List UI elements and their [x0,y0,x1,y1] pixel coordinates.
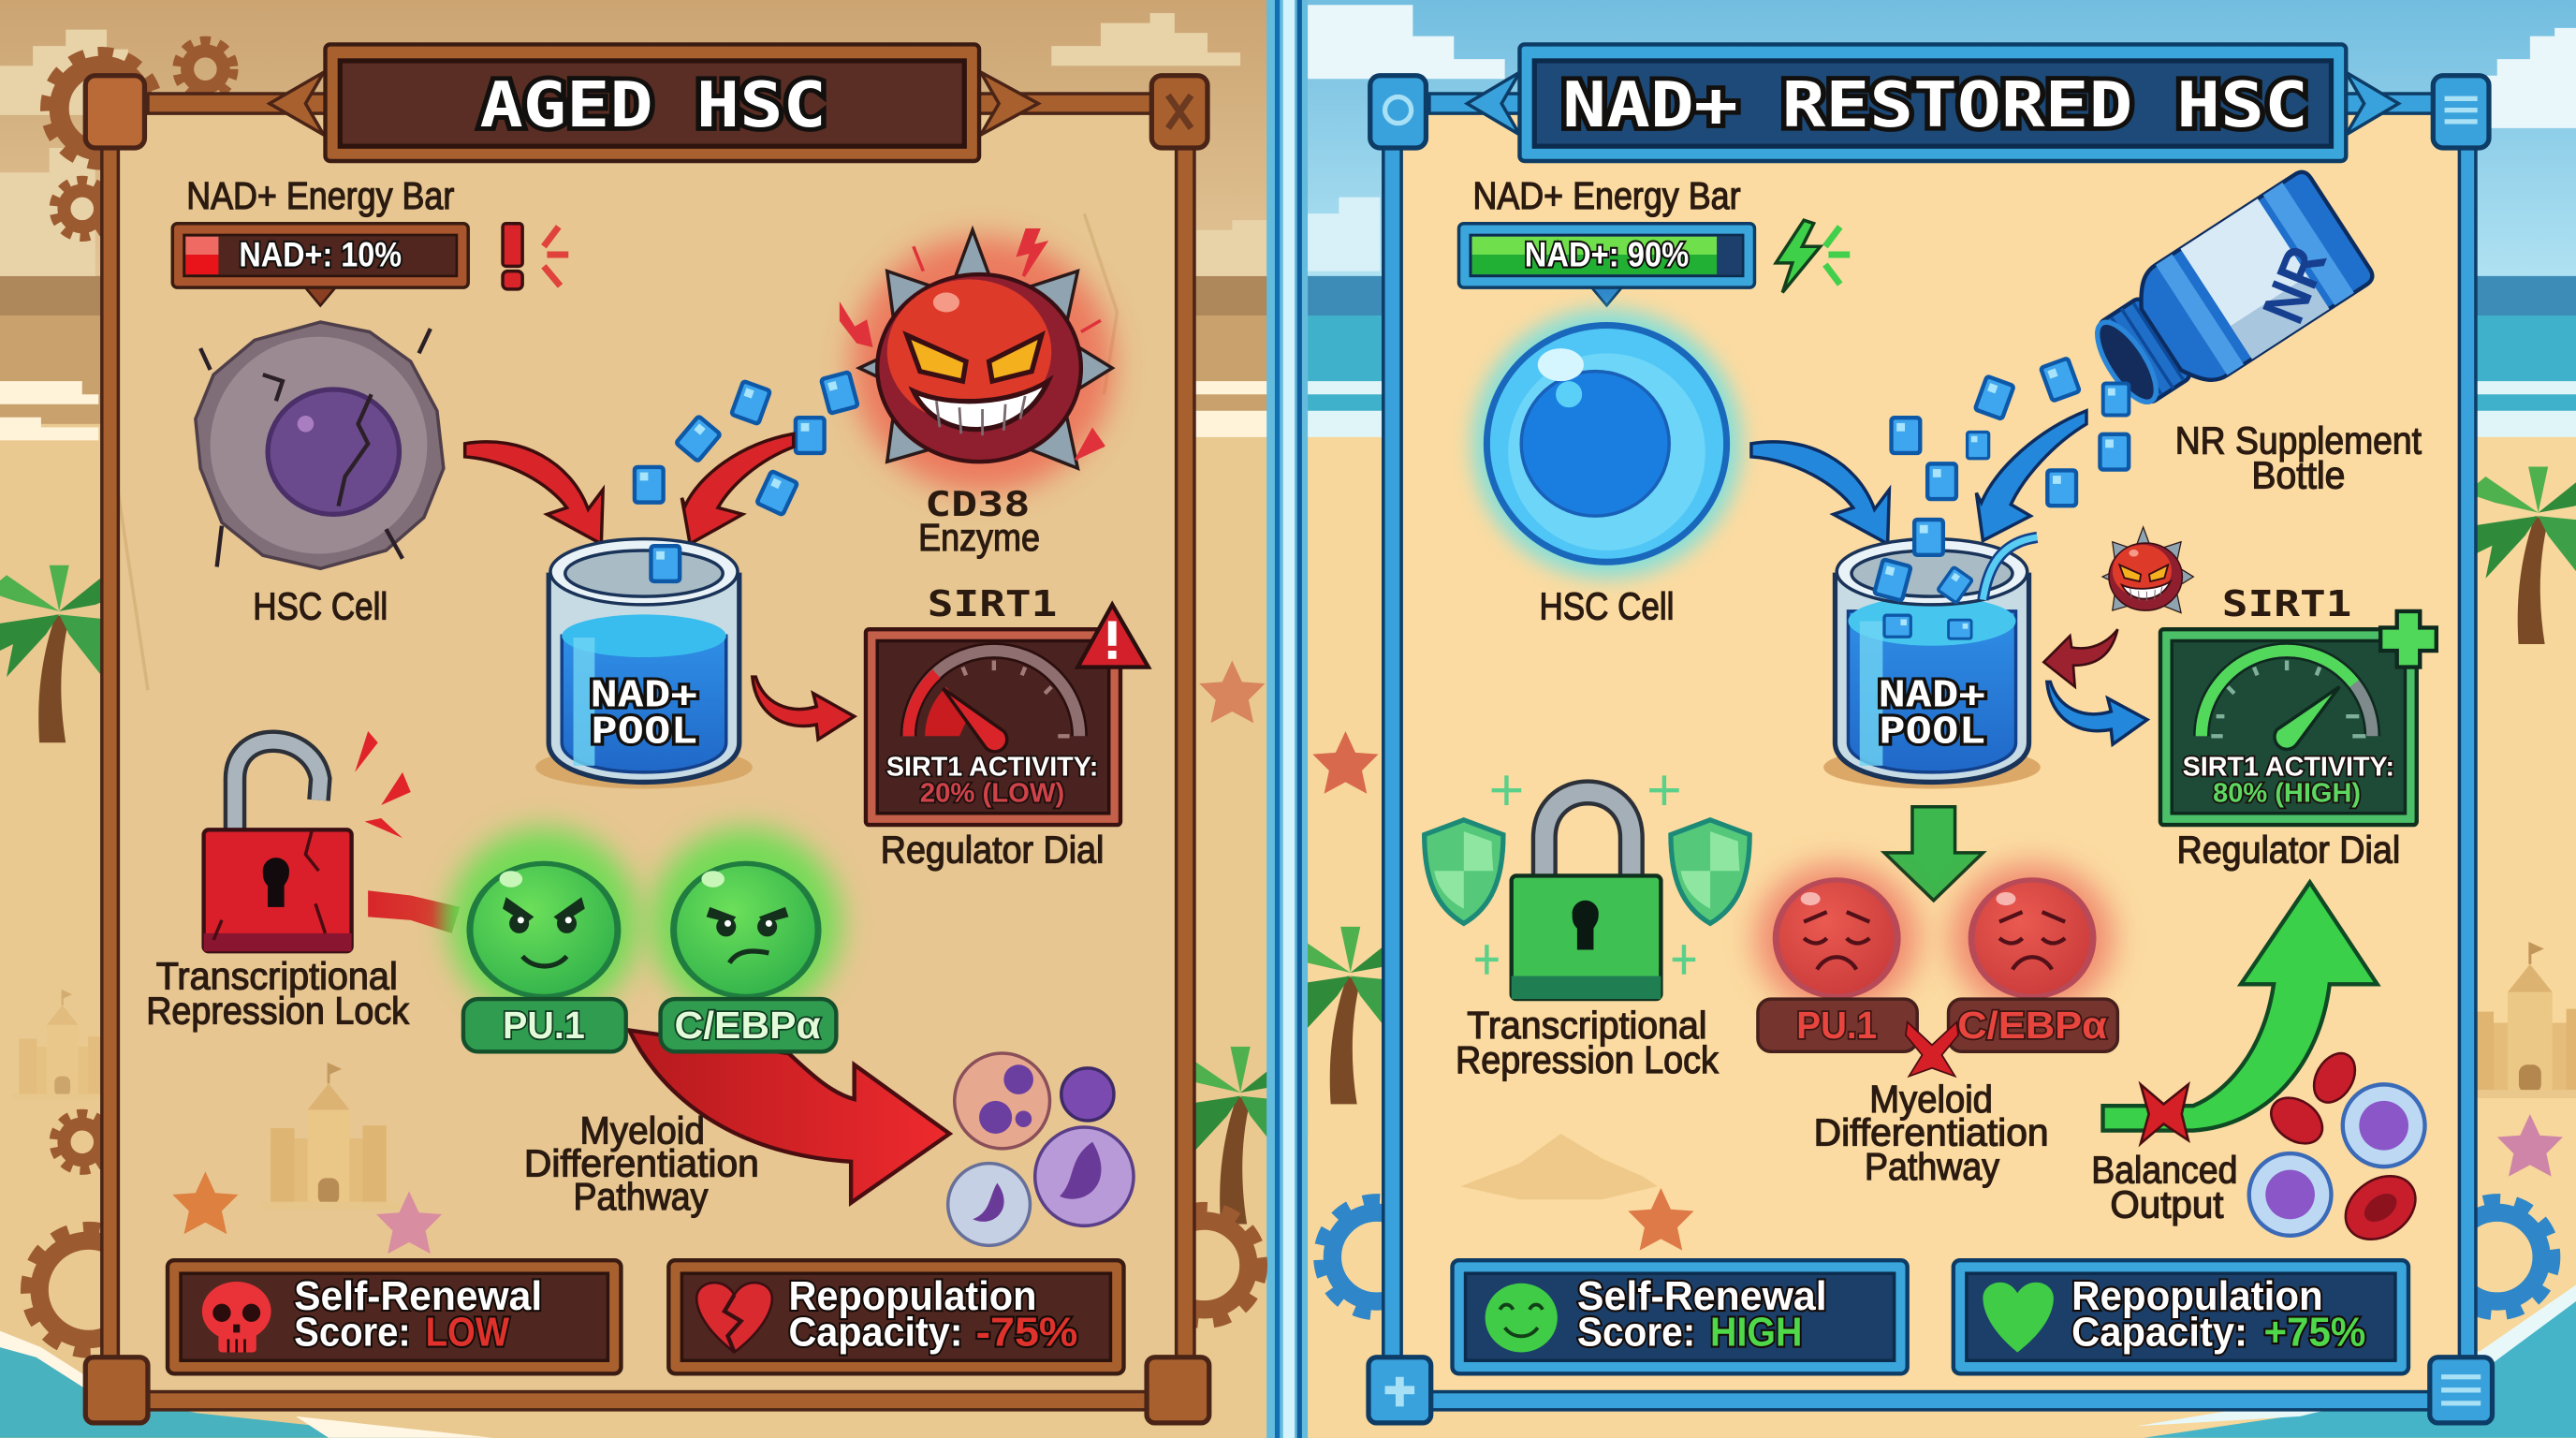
NR supplement bottle: Bottle [2251,453,2345,496]
mini CD38 enzyme [2102,527,2193,613]
icon: blocked X [1906,1022,1958,1077]
SIRT1 dial: restored: SIRT1 [2222,583,2351,625]
SIRT1 dial: restored: Regulator Dial [2177,828,2400,871]
score box: self-renewal low: Self-Renewal [294,1273,542,1319]
panel: NAD+ restored HSC [1321,44,2553,1423]
SIRT1 dial: aged: SIRT1 [928,583,1057,625]
transcriptional repression lock: closed [1425,775,1749,1081]
C/EBPα ball: repressed [1949,862,2117,1051]
SIRT1 dial: aged: SIRT1 ACTIVITY: [886,752,1098,782]
score box: self-renewal high: HIGH [1710,1309,1802,1355]
label: balanced output [2091,1149,2237,1226]
SIRT1 dial: aged [866,583,1149,871]
score box: repopulation +75%: Repopulation [2071,1273,2323,1319]
SIRT1 dial: aged: 20% (LOW) [920,778,1064,808]
NAD+ cubes: supplied [1889,356,2130,507]
arrow: balanced output up [2103,882,2378,1144]
balanced blood cells [2249,1046,2427,1253]
title banner: restored: NAD+ RESTORED HSC [1562,68,2308,141]
arrow: cell to pool [465,442,603,544]
HSC cell: restored [1472,309,1741,628]
transcriptional repression lock: closed: Transcriptional [1467,1004,1707,1047]
C/EBPα ball: repressed: C/EBPα [1957,1004,2107,1047]
NAD+ pool: aged: POOL [591,710,697,752]
PU.1 ball: overactive [448,829,639,1051]
NAD+ energy bar: restored: NAD+: 90% [1525,235,1689,273]
background: aged beach [0,0,1319,1438]
label: balanced output: Output [2110,1183,2224,1226]
arrow: enzyme to pool [681,433,794,544]
NR supplement bottle: NR Supplement [2175,418,2422,462]
icon: exclamation alert [503,224,568,289]
HSC cell: aged [196,322,444,628]
myeloid cells output [948,1053,1134,1245]
NAD+ pool: restored: POOL [1879,710,1985,752]
icon: smile [1486,1284,1558,1352]
NAD+ pool: aged [535,539,753,788]
score box: repopulation +75% [1954,1260,2408,1373]
NAD+ pool: aged: NAD+ [591,674,697,716]
arrow: cell to pool [1751,442,1889,544]
title banner: restored [1519,44,2346,161]
SIRT1 dial: restored: 80% (HIGH) [2213,778,2361,808]
C/EBPα ball: overactive: C/EBPα [674,1004,821,1047]
label: myeloid pathway: Pathway [574,1175,709,1218]
label: myeloid pathway: Differentiation [524,1142,759,1185]
score box: repopulation -75% [668,1260,1123,1373]
gears: aged [28,41,1260,1351]
score box: repopulation +75%: +75% [2264,1309,2365,1355]
title banner: aged: AGED HSC [479,68,827,141]
decor: sandcastle and starfish [172,1063,442,1254]
icon: warning triangle [1077,605,1149,668]
score box: repopulation -75%: Repopulation [788,1273,1036,1319]
SIRT1 dial: restored: SIRT1 ACTIVITY: [2183,752,2394,782]
icon: shields [1425,820,1749,923]
score box: repopulation +75%: Capacity: [2071,1309,2247,1355]
title banner: aged [326,44,979,161]
transcriptional repression lock: closed: Repression Lock [1456,1038,1720,1081]
HSC cell: restored: HSC Cell [1540,585,1674,628]
SIRT1 dial: restored [2160,583,2437,871]
icon: skull [202,1282,271,1352]
SIRT1 dial: aged: Regulator Dial [881,828,1104,871]
NR supplement bottle [2076,169,2422,496]
score box: self-renewal high: Self-Renewal [1577,1273,1827,1319]
score box: repopulation -75%: -75% [976,1309,1077,1355]
frame: aged [85,72,1209,1423]
decor: sand mound and starfish [1460,1134,1694,1251]
icon: green heart [1983,1283,2054,1352]
transcriptional repression lock: broken [146,731,411,1032]
NAD+ pool: restored [1823,518,2041,788]
label: balanced output: Balanced [2091,1149,2237,1192]
arrow: bottle to pool [1976,411,2086,540]
score box: self-renewal high: Score: [1577,1309,1695,1355]
label: myeloid pathway blocked: Differentiation [1814,1110,2049,1153]
arrow: lock to PU.1 [368,890,460,933]
CD38 enzyme [838,230,1114,559]
arrow: inhibited enzyme [2043,629,2117,687]
HSC cell: aged: HSC Cell [253,585,388,628]
icon: lightning bolt [1776,220,1850,292]
NAD+ energy bar: aged [172,174,468,305]
frame: restored [1368,72,2492,1423]
center divider [1266,0,1308,1438]
NR supplement bottle: NR [2250,238,2339,332]
parchment: restored [1399,105,2465,1397]
C/EBPα ball: overactive [651,829,842,1051]
background: restored beach [1271,0,2576,1438]
score box: self-renewal low: Score: [294,1309,411,1355]
parchment: aged [115,105,1179,1397]
NAD+ pool: restored: NAD+ [1879,674,1985,716]
transcriptional repression lock: broken: Transcriptional [156,955,398,998]
label: myeloid pathway [524,1109,759,1218]
NAD+ energy bar: restored [1459,174,1754,305]
PU.1 ball: repressed [1754,862,1919,1051]
transcriptional repression lock: broken: Repression Lock [146,989,410,1032]
CD38 enzyme: CD38 [925,484,1030,524]
arrow: pool to SIRT1 [753,677,855,740]
label: myeloid pathway blocked: Myeloid [1869,1078,1993,1121]
arrow: pool to SIRT1 [2047,682,2147,744]
arrow: down to repressed factors [1884,807,1983,901]
NAD+ energy bar: aged: NAD+: 10% [239,235,402,273]
PU.1 ball: repressed: PU.1 [1796,1004,1877,1047]
PU.1 ball: overactive: PU.1 [503,1004,585,1047]
gears: restored [1321,1201,2553,1313]
score box: repopulation -75%: Capacity: [788,1309,962,1355]
label: myeloid pathway blocked [1814,1078,2049,1188]
CD38 enzyme: Enzyme [918,516,1040,559]
NAD+ energy bar: restored: NAD+ Energy Bar [1472,174,1741,217]
label: myeloid pathway blocked: Pathway [1865,1145,2000,1188]
arrow: myeloid differentiation [629,1030,949,1203]
label: myeloid pathway: Myeloid [580,1109,705,1152]
score box: self-renewal low [168,1260,621,1373]
NAD+ cubes: drained [633,370,860,518]
icon: green plus [2380,611,2437,668]
panel: aged HSC [28,41,1260,1423]
icon: broken heart [696,1283,772,1352]
score box: self-renewal high [1453,1260,1908,1373]
NAD+ energy bar: aged: NAD+ Energy Bar [186,174,454,217]
score box: self-renewal low: LOW [426,1309,510,1355]
